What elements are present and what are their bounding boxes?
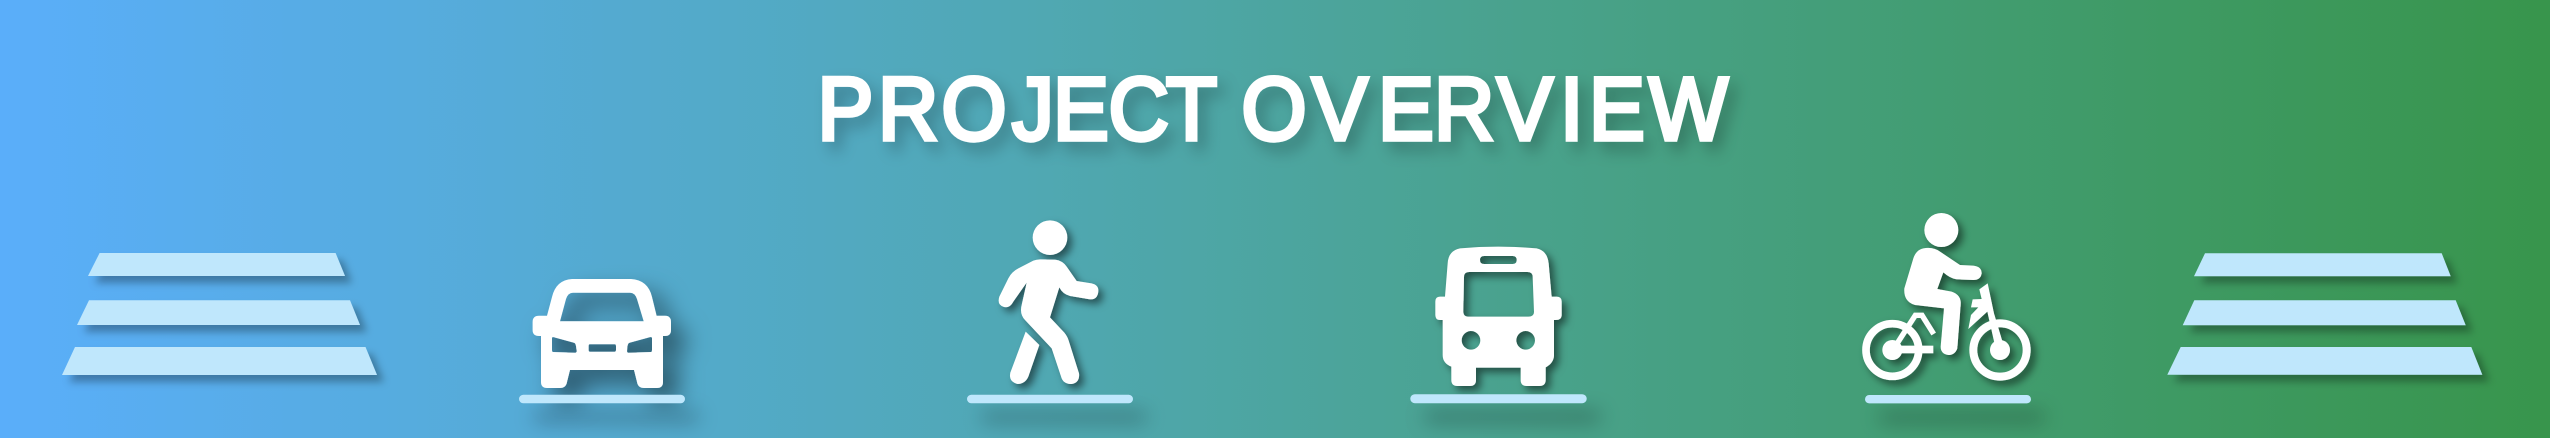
pedestrian ground bar [967,395,1133,403]
cyclist figure [1866,213,2027,377]
bus ground bar [1410,394,1587,403]
rear wheel [1866,324,1919,376]
chain stay [1895,346,1933,353]
icon: cyclist [1865,213,2031,403]
cyclist head [1924,213,1958,247]
left stripe bottom [62,347,377,375]
cyclist ground bar [1865,395,2031,403]
pedestrian figure [999,220,1098,384]
title: PROJECT OVERVIEW [818,60,1728,159]
icon: pedestrian [967,220,1133,403]
left stripe top [88,253,345,276]
pedestrian back leg [1010,332,1039,384]
car ground bar [519,395,685,403]
right stripe bottom [2167,347,2482,375]
car silhouette [533,279,671,388]
rear hub [1882,340,1902,360]
front wheel [1973,323,2027,377]
left crosswalk stripes [62,253,377,375]
icon: bus [1410,247,1587,403]
pedestrian body [999,259,1098,384]
left stripe middle [77,300,360,325]
right crosswalk stripes [2167,253,2482,375]
right stripe middle [2183,300,2466,325]
rear frame [1893,315,1934,349]
bus silhouette [1435,247,1562,386]
front fork and handlebar stem [1968,283,2005,350]
icon: car [519,279,685,403]
pedestrian head [1033,220,1067,255]
right stripe top [2194,253,2451,276]
front hub [1990,340,2010,360]
cyclist body [1904,248,1982,355]
